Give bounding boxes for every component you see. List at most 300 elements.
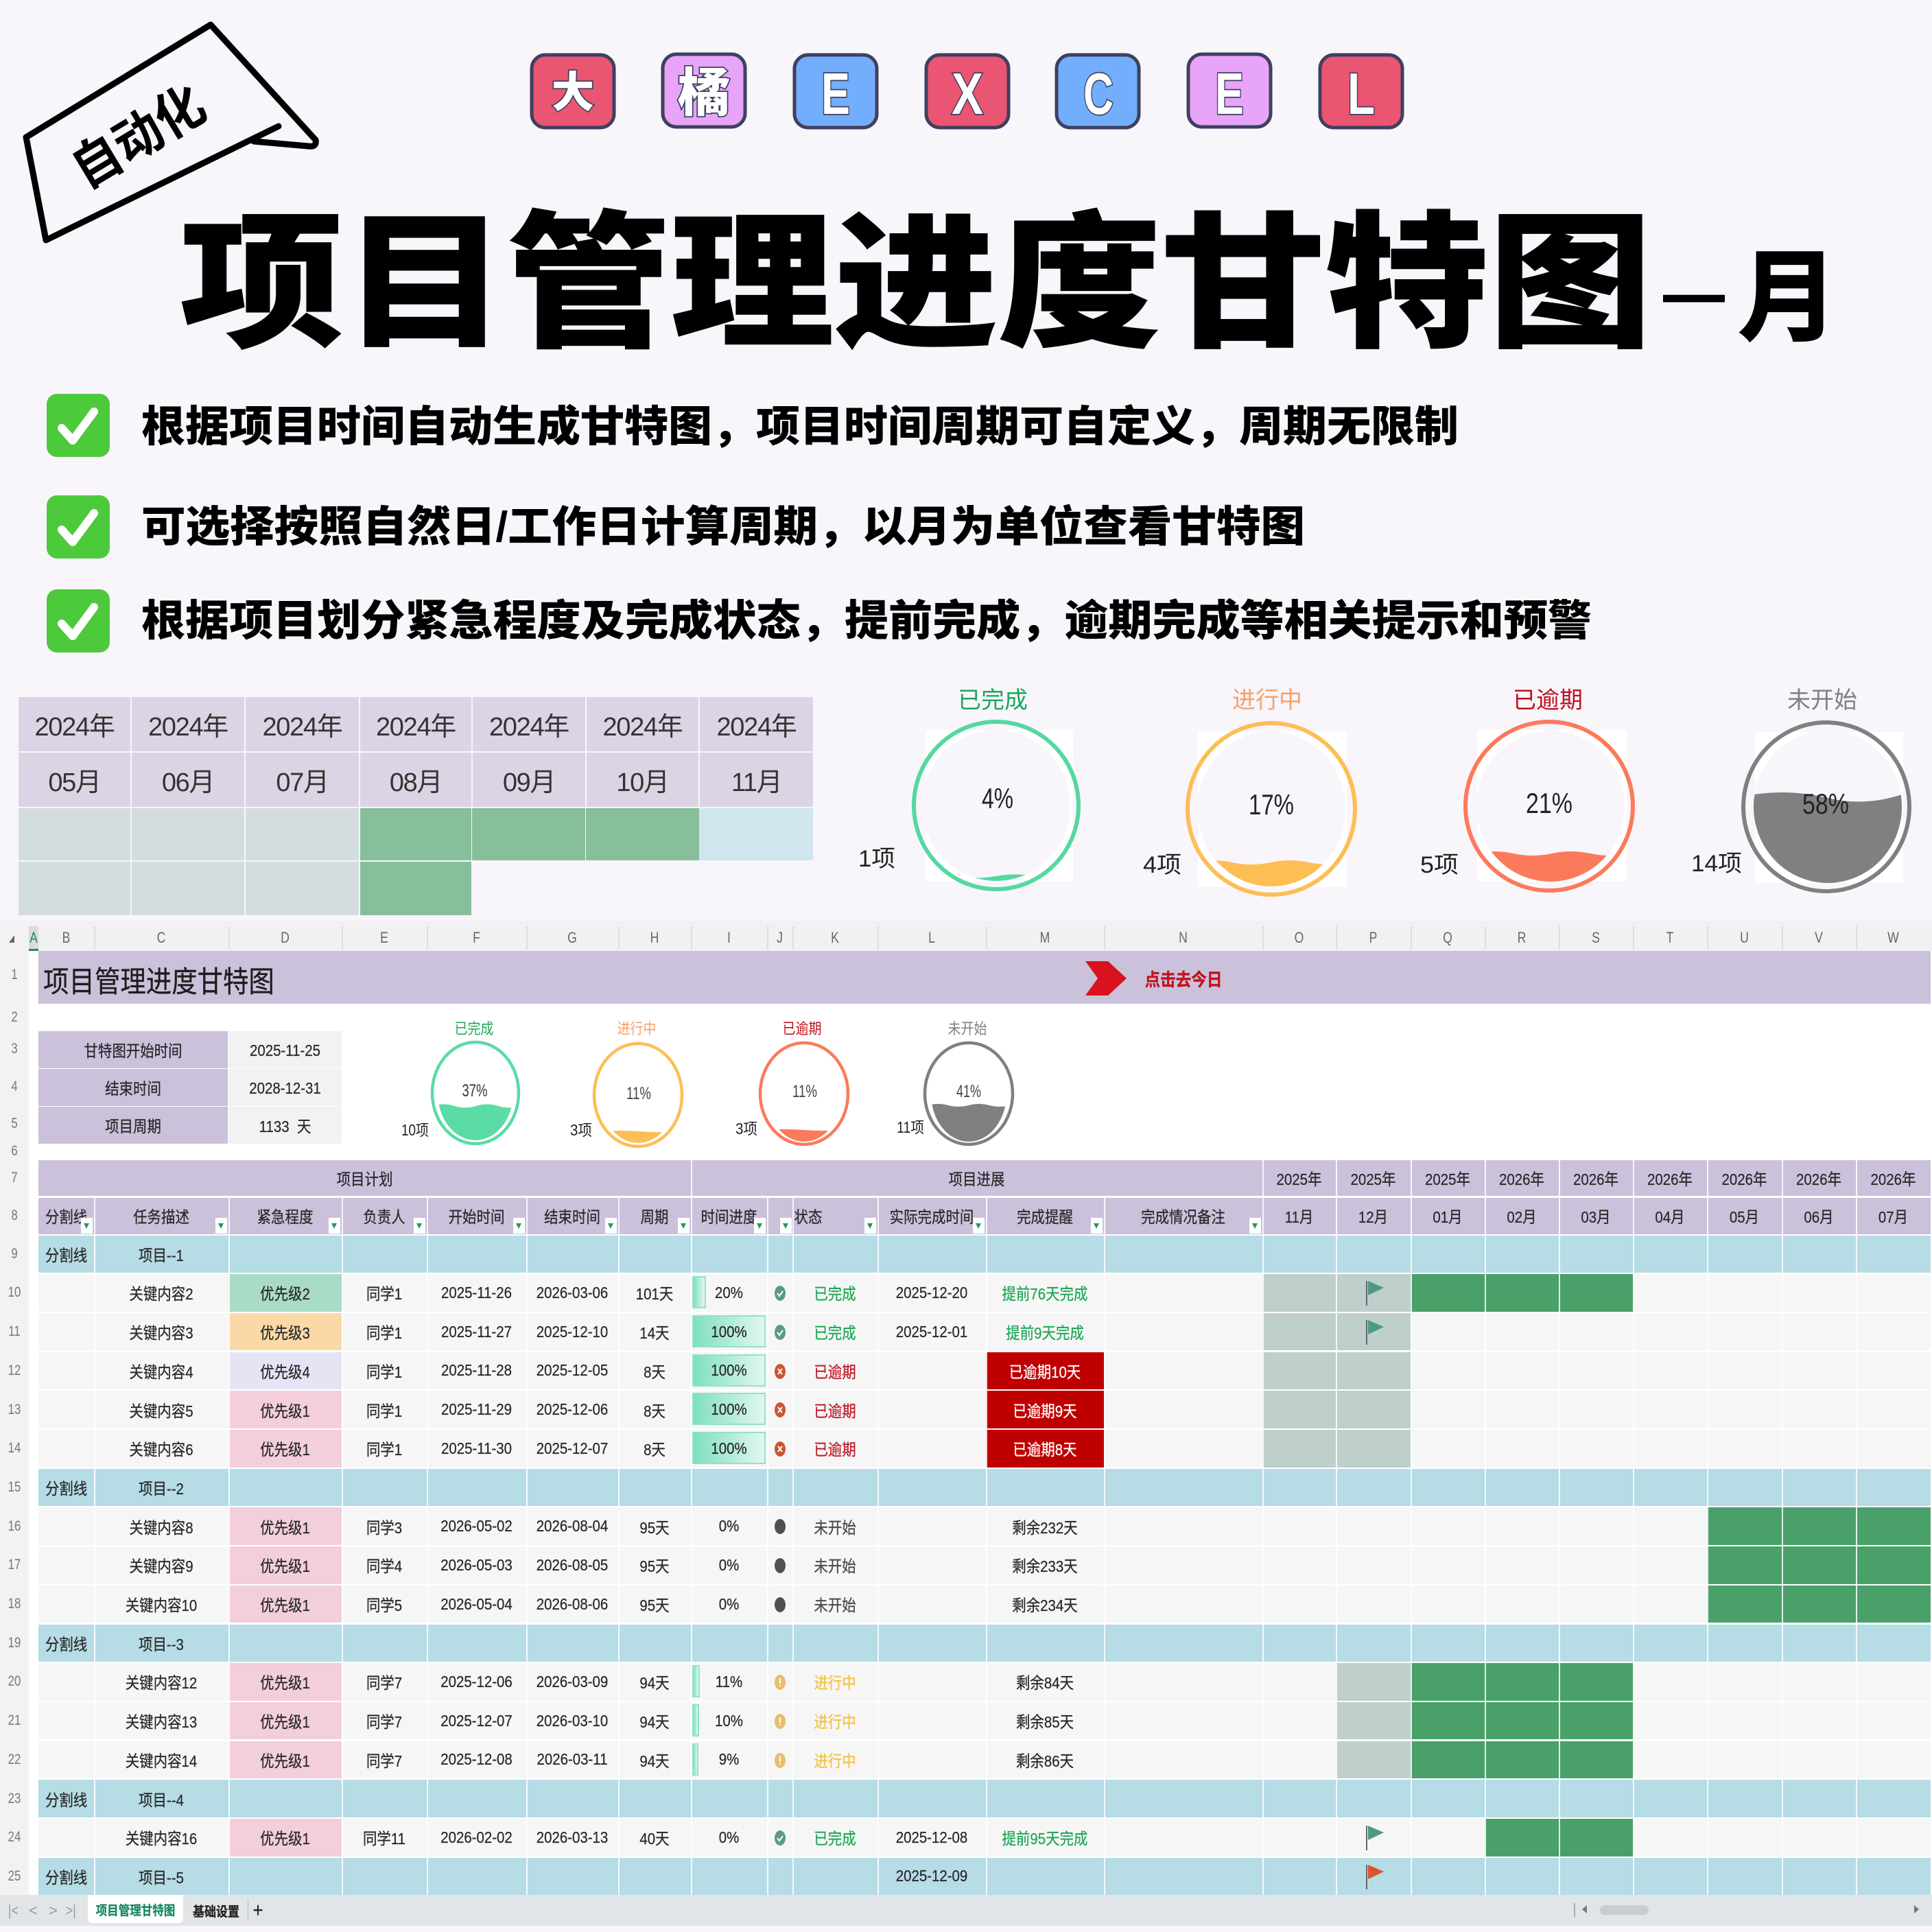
row 12: 8天 — [644, 1363, 665, 1381]
row 24: 关键内容16 — [126, 1830, 197, 1848]
column letters: R — [1518, 929, 1526, 946]
badge row: 大橘EXCEL: E — [821, 62, 850, 127]
row 22: 优先级1 — [260, 1752, 310, 1770]
row 17: 17 — [8, 1557, 21, 1572]
row 16: 2026-08-04 — [537, 1517, 608, 1535]
bottom sheet tab bar: + — [252, 1899, 263, 1921]
row 12: 100% — [711, 1361, 747, 1379]
row 13: 已逾期 — [814, 1402, 856, 1420]
row 17: 2026-08-05 — [537, 1556, 608, 1574]
row 1: sheet title band: 项目管理进度甘特图 — [43, 966, 274, 999]
row 16: 关键内容8 — [129, 1519, 193, 1537]
row 10 — [8, 1274, 1931, 1312]
column letters: K — [831, 929, 839, 946]
row 16: 16 — [8, 1518, 21, 1534]
row 17: 95天 — [639, 1557, 670, 1575]
sample gantt table (top left): 2024年 — [376, 713, 456, 742]
gauge: 未开始 58% — [1691, 687, 1909, 892]
row 8: column headers with filter buttons: 04月 — [1655, 1208, 1685, 1226]
row 10: 提前76天完成 — [1002, 1285, 1087, 1303]
row numbers 2-6: 3 — [11, 1041, 18, 1057]
row 7: section headers: 2026年 — [1871, 1170, 1916, 1188]
row 13: 13 — [8, 1402, 21, 1417]
row 21: 10% — [715, 1712, 743, 1730]
row 18 — [8, 1586, 1931, 1623]
row 23: divider 项目4: 项目--4 — [139, 1791, 184, 1809]
row 7: section headers: 2026年 — [1573, 1170, 1618, 1188]
gauge: 未开始 58%: 未开始 — [1787, 687, 1857, 714]
row 17: 关键内容9 — [129, 1557, 193, 1575]
row 24: 24 — [8, 1829, 21, 1845]
bottom sheet tab bar: 基础设置 — [193, 1905, 239, 1920]
row 22: 剩余86天 — [1016, 1752, 1074, 1770]
badge row: 大橘EXCEL: 大 — [552, 69, 594, 117]
row 17: 2026-05-03 — [440, 1556, 513, 1574]
row 11: 11 — [8, 1323, 21, 1339]
gauge: 已逾期 21%: 已逾期 — [1513, 687, 1583, 714]
row 25: divider 项目5 — [8, 1858, 1931, 1895]
sample gantt table (top left): 05月 — [48, 768, 101, 797]
badge row: 大橘EXCEL: C — [1083, 62, 1114, 127]
row 10: 已完成 — [814, 1285, 856, 1303]
row 14: 2025-12-07 — [537, 1439, 608, 1457]
sheet gauge: 已完成 37%: 10项 — [401, 1121, 429, 1139]
row 22: 关键内容14 — [126, 1752, 197, 1770]
row 22: 进行中 — [814, 1752, 856, 1770]
row 14: 100% — [711, 1439, 747, 1457]
column letters — [9, 926, 1899, 951]
row 13: 同学1 — [366, 1402, 402, 1420]
main title: 月 — [1739, 242, 1838, 353]
badge row: 大橘EXCEL — [532, 54, 1402, 128]
row 8: column headers with filter buttons: 8 — [11, 1208, 18, 1223]
column letters: F — [473, 929, 480, 946]
row 14: 已逾期8天 — [1013, 1441, 1077, 1459]
column letters: E — [380, 929, 388, 946]
row 18: 同学5 — [366, 1597, 402, 1614]
date info table: 项目周期 — [105, 1118, 161, 1135]
row 8: column headers with filter buttons — [11, 1198, 1931, 1234]
sample gantt table (top left): 2024年 — [148, 713, 228, 742]
feature bullet 1 — [47, 394, 1459, 457]
row 11 — [8, 1313, 1931, 1350]
row 24: 40天 — [639, 1830, 670, 1848]
row 8: column headers with filter buttons: 周期 — [641, 1208, 668, 1226]
row 7: section headers: 2025年 — [1277, 1170, 1321, 1188]
row 21: 2026-03-10 — [537, 1712, 608, 1730]
row 20: 优先级1 — [260, 1674, 310, 1692]
sheet gauge: 已完成 37%: 37% — [462, 1081, 487, 1100]
row 11: 关键内容3 — [129, 1324, 193, 1342]
row 16 — [8, 1507, 1931, 1545]
gauge: 已完成 4%: 已完成 — [958, 687, 1028, 714]
bottom sheet tab bar: < — [29, 1902, 38, 1919]
row 8: column headers with filter buttons: 01月 — [1433, 1208, 1463, 1226]
row 22: 同学7 — [366, 1752, 402, 1770]
row 24: 优先级1 — [260, 1830, 310, 1848]
row 24 — [8, 1819, 1931, 1857]
sample gantt table (top left): 07月 — [276, 768, 329, 797]
bottom sheet tab bar: |< — [8, 1902, 19, 1919]
date info table: 结束时间 — [105, 1080, 161, 1098]
row 16: 0% — [719, 1517, 739, 1535]
row 15: divider 项目2: 项目--2 — [139, 1480, 184, 1498]
row 24: 同学11 — [363, 1830, 405, 1848]
row 20: 94天 — [639, 1674, 670, 1692]
row 18: 未开始 — [814, 1597, 856, 1614]
row 17: 优先级1 — [260, 1557, 310, 1575]
gauge: 进行中 17%: 进行中 — [1232, 687, 1302, 714]
row 20: 2025-12-06 — [440, 1673, 513, 1690]
row 21: 同学7 — [366, 1713, 402, 1731]
row 18: 2026-05-04 — [440, 1595, 513, 1613]
row 25: divider 项目5: 项目--5 — [139, 1869, 184, 1887]
row 24: 2026-02-02 — [440, 1828, 513, 1846]
gauge: 已逾期 21%: 5项 — [1420, 852, 1459, 878]
row 11: 提前9天完成 — [1006, 1324, 1084, 1342]
row 15: divider 项目2: 分割线 — [45, 1480, 87, 1498]
row 10: 同学1 — [366, 1285, 402, 1303]
row 8: column headers with filter buttons: 03月 — [1581, 1208, 1611, 1226]
row 21: 21 — [8, 1712, 21, 1728]
sheet gauge: 未开始 41% — [897, 1020, 1013, 1146]
sheet gauge: 进行中 11%: 11% — [626, 1084, 651, 1103]
row 22: 2025-12-08 — [440, 1750, 513, 1768]
row 10: 10 — [8, 1284, 21, 1300]
row 24: 已完成 — [814, 1830, 856, 1848]
gauge: 进行中 17%: 17% — [1249, 788, 1294, 821]
date info table: 甘特图开始时间 — [84, 1042, 182, 1060]
column letters: W — [1887, 929, 1899, 946]
row 12: 已逾期10天 — [1009, 1363, 1081, 1381]
row 14: 同学1 — [366, 1441, 402, 1459]
spreadsheet gauges — [401, 1020, 1014, 1148]
row 23: divider 项目4: 分割线 — [45, 1791, 87, 1809]
sheet gauge: 进行中 11%: 3项 — [570, 1121, 592, 1139]
row 8: column headers with filter buttons: 完成情况备注 — [1141, 1208, 1225, 1226]
row 10: 20% — [715, 1284, 743, 1301]
row 14: 2025-11-30 — [441, 1439, 512, 1457]
gauge: 进行中 17%: 4项 — [1143, 852, 1181, 878]
row 12: 2025-11-28 — [441, 1361, 512, 1379]
row 12 — [8, 1352, 1931, 1389]
row 17 — [8, 1546, 1931, 1584]
sheet gauge: 未开始 41%: 未开始 — [948, 1020, 987, 1037]
sheet gauge: 已逾期 11%: 11% — [792, 1082, 817, 1101]
row 7: section headers: 项目进展 — [949, 1170, 1004, 1188]
row 8: column headers with filter buttons: 开始时间 — [449, 1208, 504, 1226]
row 16: 2026-05-02 — [440, 1517, 513, 1535]
row 21 — [8, 1702, 1931, 1739]
row 8: column headers with filter buttons: 任务描述 — [133, 1208, 189, 1226]
row 17: 未开始 — [814, 1557, 856, 1575]
row 8: column headers with filter buttons: 07月 — [1878, 1208, 1908, 1226]
badge row: 大橘EXCEL: 橘 — [678, 64, 730, 123]
row 15: divider 项目2: 15 — [8, 1479, 21, 1495]
row 13 — [8, 1391, 1931, 1428]
row 11: 优先级3 — [260, 1324, 310, 1342]
row 20: 同学7 — [366, 1674, 402, 1692]
gauge: 已完成 4% — [858, 687, 1079, 892]
badge row: 大橘EXCEL: X — [952, 62, 983, 127]
row 14: 已逾期 — [814, 1441, 856, 1459]
row 8: column headers with filter buttons: 02月 — [1507, 1208, 1537, 1226]
row 7: section headers: 2026年 — [1796, 1170, 1841, 1188]
row 11: 2025-11-27 — [441, 1323, 512, 1341]
row 11: 同学1 — [366, 1324, 402, 1342]
row 10: 关键内容2 — [129, 1285, 193, 1303]
row 13: 2025-12-06 — [537, 1400, 608, 1418]
gauge: 未开始 58%: 58% — [1802, 788, 1849, 820]
column letters: B — [62, 929, 70, 946]
column letters: N — [1179, 929, 1188, 946]
row 10: 2026-03-06 — [537, 1284, 608, 1301]
row 12: 优先级4 — [260, 1363, 310, 1381]
row 1: sheet title band: 点击去今日 — [1144, 969, 1223, 989]
row 12: 2025-12-05 — [537, 1361, 608, 1379]
row numbers 2-6 — [11, 1009, 18, 1159]
row 14: 14 — [8, 1440, 21, 1456]
row 7: section headers — [11, 1160, 1931, 1196]
sheet gauge: 已完成 37%: 已完成 — [454, 1020, 494, 1037]
sample gantt table (top left): 2024年 — [262, 713, 342, 742]
row 8: column headers with filter buttons: 紧急程度 — [257, 1208, 313, 1226]
row 20: 2026-03-09 — [537, 1673, 608, 1690]
row 25: divider 项目5: 分割线 — [45, 1869, 87, 1887]
column letters: L — [928, 929, 935, 946]
row 19: divider 项目3: 分割线 — [45, 1636, 87, 1653]
row 8: column headers with filter buttons: 05月 — [1730, 1208, 1759, 1226]
row 11: 已完成 — [814, 1324, 856, 1342]
date info table: 2025-11-25 — [250, 1041, 320, 1059]
gauge: 已完成 4%: 1项 — [858, 846, 895, 872]
row 11: 100% — [711, 1323, 747, 1341]
row 16: 同学3 — [366, 1519, 402, 1537]
row 8: column headers with filter buttons: 结束时间 — [544, 1208, 600, 1226]
row 22: 9% — [719, 1750, 739, 1768]
row 12: 已逾期 — [814, 1363, 856, 1381]
row 8: column headers with filter buttons: 完成提醒 — [1017, 1208, 1073, 1226]
row 13: 已逾期9天 — [1013, 1402, 1077, 1420]
row 24: 提前95天完成 — [1002, 1830, 1087, 1848]
row 22: 22 — [8, 1752, 21, 1767]
row 21: 2025-12-07 — [440, 1712, 513, 1730]
row 19: divider 项目3: 项目--3 — [139, 1636, 184, 1653]
row 20: 关键内容12 — [126, 1674, 197, 1692]
column letters: Q — [1443, 929, 1452, 946]
row 8: column headers with filter buttons: 06月 — [1804, 1208, 1834, 1226]
row 24: 2025-12-08 — [896, 1828, 967, 1846]
row 1: sheet title band: 1 — [11, 967, 18, 982]
row numbers 2-6: 6 — [11, 1143, 18, 1159]
sample gantt table (top left): 06月 — [162, 768, 214, 797]
date info table: 1133 天 — [259, 1118, 311, 1135]
row 18: 剩余234天 — [1012, 1597, 1078, 1614]
column letters: A — [30, 929, 38, 946]
gauge: 已逾期 21% — [1420, 687, 1633, 892]
gauge: 已完成 4%: 4% — [982, 782, 1013, 814]
row 8: column headers with filter buttons: 状态 — [794, 1208, 822, 1226]
row 10: 101天 — [636, 1285, 673, 1303]
feature bullet 3 — [47, 589, 1592, 652]
row 18: 95天 — [639, 1597, 670, 1614]
row 20: 剩余84天 — [1016, 1674, 1074, 1692]
row 23: divider 项目4 — [8, 1780, 1931, 1817]
row 7: section headers: 2025年 — [1351, 1170, 1395, 1188]
date info table: 2028-12-31 — [249, 1079, 321, 1096]
row 20: 11% — [716, 1673, 742, 1690]
row 18: 优先级1 — [260, 1597, 310, 1614]
column header bar — [0, 921, 1932, 951]
row 8: column headers with filter buttons: 负责人 — [363, 1208, 405, 1226]
row 13: 关键内容5 — [129, 1402, 193, 1420]
bottom sheet tab bar — [0, 1895, 1932, 1926]
sample gantt table (top left): 10月 — [616, 768, 669, 797]
sample gantt table (top left): 2024年 — [489, 713, 569, 742]
row 9: divider 项目1: 9 — [11, 1246, 18, 1262]
row 12: 关键内容4 — [129, 1363, 193, 1381]
row 20: 进行中 — [814, 1674, 856, 1692]
bottom sheet tab bar: >| — [66, 1902, 76, 1919]
column letters: M — [1040, 929, 1050, 946]
row 22: 2026-03-11 — [537, 1750, 608, 1768]
sheet gauge: 已完成 37% — [401, 1020, 520, 1146]
row 14: 优先级1 — [260, 1441, 310, 1459]
row 14 — [8, 1430, 1931, 1468]
row 17: 0% — [719, 1556, 739, 1574]
main title: 项目管理进度甘特图 — [180, 202, 1652, 366]
row 7: section headers: 2026年 — [1647, 1170, 1693, 1188]
column letters: G — [567, 929, 577, 946]
column letters: S — [1592, 929, 1600, 946]
row 25: divider 项目5: 2025-12-09 — [896, 1867, 967, 1885]
row 16: 剩余232天 — [1012, 1519, 1078, 1537]
sheet gauge: 进行中 11% — [570, 1020, 682, 1146]
sample gantt table (top left): 2024年 — [716, 713, 797, 742]
sample gantt table (top left): 11月 — [731, 768, 781, 797]
feature bullet 2: 可选择按照自然日/工作日计算周期，以月为单位查看甘特图 — [141, 503, 1305, 551]
row 13: 8天 — [644, 1402, 665, 1420]
sample gantt table (top left) — [19, 697, 813, 915]
row 11: 14天 — [639, 1324, 670, 1342]
row 25: divider 项目5: 25 — [8, 1868, 21, 1884]
column letters: I — [727, 929, 731, 946]
date info table — [38, 1031, 342, 1144]
feature bullet 2 — [47, 495, 1305, 558]
sample gantt table (top left): 2024年 — [34, 713, 115, 742]
row 14: 关键内容6 — [129, 1441, 193, 1459]
row 12: 同学1 — [366, 1363, 402, 1381]
row 21: 94天 — [639, 1713, 670, 1731]
row 19: divider 项目3 — [8, 1625, 1931, 1662]
row 24: 0% — [719, 1828, 739, 1846]
row 17: 剩余233天 — [1012, 1557, 1078, 1575]
row numbers 2-6: 4 — [11, 1079, 18, 1094]
feature bullet 3: 根据项目划分紧急程度及完成状态，提前完成，逾期完成等相关提示和预警 — [141, 598, 1592, 645]
row 13: 100% — [711, 1400, 747, 1418]
gauge: 进行中 17% — [1143, 687, 1355, 895]
row 17: 同学4 — [366, 1557, 402, 1575]
row 8: column headers with filter buttons: 12月 — [1358, 1208, 1388, 1226]
row 7: section headers: 2026年 — [1499, 1170, 1544, 1188]
row 24: 2026-03-13 — [537, 1828, 608, 1846]
row 18: 2026-08-06 — [537, 1595, 608, 1613]
row 10: 2025-12-20 — [896, 1284, 967, 1301]
row 22: 94天 — [639, 1752, 670, 1770]
row 7: section headers: 项目计划 — [337, 1170, 392, 1188]
tag: 自动化: 自动化 — [62, 75, 215, 200]
sheet gauge: 已逾期 11%: 已逾期 — [782, 1020, 822, 1037]
row 19: divider 项目3: 19 — [8, 1635, 21, 1651]
row 11: 2025-12-10 — [537, 1323, 608, 1341]
sheet gauge: 进行中 11%: 进行中 — [617, 1020, 656, 1037]
status gauges (top right) — [858, 687, 1911, 897]
row 8: column headers with filter buttons: 实际完成时间 — [890, 1208, 974, 1226]
row 1: sheet title band — [11, 951, 1931, 1004]
main title: — — [1664, 260, 1724, 328]
row 16: 优先级1 — [260, 1519, 310, 1537]
sheet gauge: 未开始 41%: 41% — [956, 1082, 981, 1101]
column letters: U — [1740, 929, 1749, 946]
column letters: J — [777, 929, 783, 946]
row 18: 0% — [719, 1595, 739, 1613]
column letters: T — [1666, 929, 1673, 946]
row 11: 2025-12-01 — [896, 1323, 967, 1341]
tag: 自动化 — [26, 25, 316, 240]
row 13: 2025-11-29 — [441, 1400, 512, 1418]
gauge: 未开始 58%: 14项 — [1691, 851, 1742, 877]
row 9: divider 项目1: 分割线 — [45, 1247, 87, 1264]
sample gantt table (top left): 09月 — [503, 768, 555, 797]
row 15: divider 项目2 — [8, 1469, 1931, 1506]
row 12: 12 — [8, 1363, 21, 1378]
row 21: 剩余85天 — [1016, 1713, 1074, 1731]
badge row: 大橘EXCEL: E — [1215, 62, 1244, 127]
row 16: 95天 — [639, 1519, 670, 1537]
row 7: section headers: 2026年 — [1722, 1170, 1767, 1188]
row 14: 8天 — [644, 1441, 665, 1459]
row 8: column headers with filter buttons: 分割线 — [45, 1208, 87, 1226]
sheet gauge: 未开始 41%: 11项 — [897, 1118, 924, 1136]
row 8: column headers with filter buttons: 11月 — [1285, 1208, 1313, 1226]
row 8: column headers with filter buttons: 时间进度 — [701, 1208, 757, 1226]
column letters: H — [650, 929, 659, 946]
column letters: P — [1369, 929, 1377, 946]
sheet gauge: 已逾期 11%: 3项 — [735, 1120, 757, 1138]
top banner graphics: tag, badges, title, bullets — [23, 22, 1838, 652]
row 10: 2025-11-26 — [441, 1284, 512, 1301]
sample gantt table (top left): 2024年 — [602, 713, 683, 742]
row numbers 2-6: 5 — [11, 1116, 18, 1131]
row 18: 18 — [8, 1596, 21, 1612]
gauge: 已逾期 21%: 21% — [1526, 787, 1572, 819]
row 16: 未开始 — [814, 1519, 856, 1537]
row 9: divider 项目1 — [11, 1236, 1931, 1273]
row 21: 关键内容13 — [126, 1713, 197, 1731]
feature bullet 1: 根据项目时间自动生成甘特图，项目时间周期可自定义，周期无限制 — [141, 403, 1459, 451]
column letters: C — [157, 929, 165, 946]
row numbers 2-6: 2 — [11, 1009, 18, 1025]
row 7: section headers: 2025年 — [1425, 1170, 1470, 1188]
row 21: 优先级1 — [260, 1713, 310, 1731]
row 10: 优先级2 — [260, 1285, 310, 1303]
row 13: 优先级1 — [260, 1402, 310, 1420]
bottom sheet tab bar: 项目管理甘特图 — [96, 1904, 175, 1918]
row 21: 进行中 — [814, 1713, 856, 1731]
spreadsheet panel — [0, 921, 1932, 1926]
row 23: divider 项目4: 23 — [8, 1791, 21, 1806]
column letters: V — [1815, 929, 1823, 946]
